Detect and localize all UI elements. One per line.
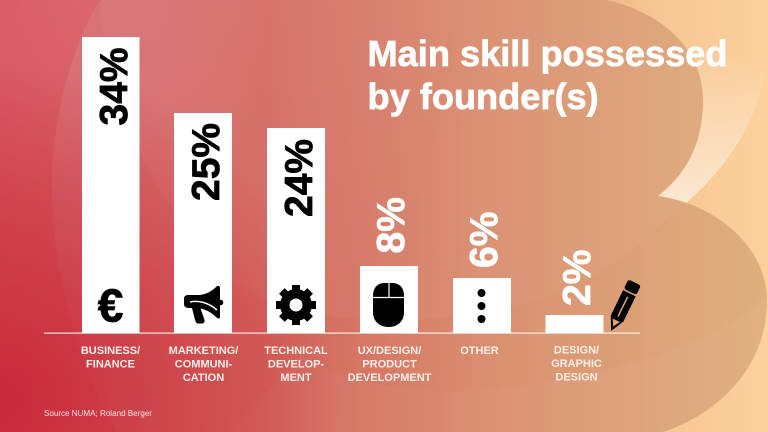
bar: marketing/communication (174, 113, 232, 333)
label: technical development: MENT (280, 372, 312, 384)
title: Main skill possessed (368, 33, 728, 74)
label: business/finance: BUSINESS/ (81, 345, 140, 357)
label: design/graphic design: DESIGN/ (554, 344, 599, 356)
source note: Source NUMA; Roland Berger (44, 408, 152, 418)
label: other: OTHER (460, 345, 499, 357)
B shape upper band (100, 0, 710, 320)
chart: bar group (82, 37, 604, 333)
icon: mouse (373, 283, 404, 327)
label: marketing/communication: MARKETING/ (169, 345, 238, 357)
icon: megaphone (184, 286, 223, 324)
bottom-left red glow (0, 60, 340, 432)
baseline axis (44, 333, 640, 334)
title: by founder(s) (368, 76, 599, 117)
icon: three dots (478, 289, 486, 323)
icon: pencil (605, 279, 641, 334)
bar: technical development (267, 128, 325, 333)
label: technical development: DEVELOP- (268, 358, 324, 370)
icon: euro: € (98, 280, 123, 332)
background crescent highlight (658, 20, 768, 203)
value: 8%: 8% (370, 197, 413, 254)
label: technical development: TECHNICAL (264, 345, 328, 357)
icon: gear (276, 285, 316, 325)
B shape lower band (230, 297, 768, 432)
label: ux/design/product development: DEVELOPMENT (348, 372, 432, 384)
label: business/finance: FINANCE (86, 358, 135, 370)
label: design/graphic design: DESIGN (555, 372, 598, 384)
value: 6%: 6% (463, 212, 506, 268)
bar: ux/design/product development (360, 266, 418, 333)
label: ux/design/product development: UX/DESIGN/ (358, 345, 421, 357)
value: 34%: 34% (93, 47, 136, 126)
label: design/graphic design: GRAPHIC (551, 358, 602, 370)
bar: other (453, 278, 511, 333)
value: 25%: 25% (185, 123, 228, 201)
label: ux/design/product development: PRODUCT (362, 358, 417, 370)
value: 24%: 24% (278, 139, 321, 217)
label: marketing/communication: CATION (183, 372, 224, 384)
bar: design/graphic design (546, 315, 604, 333)
value: 2%: 2% (556, 250, 599, 306)
label: marketing/communication: COMMUNI- (175, 358, 233, 370)
bar: business/finance (82, 37, 140, 333)
